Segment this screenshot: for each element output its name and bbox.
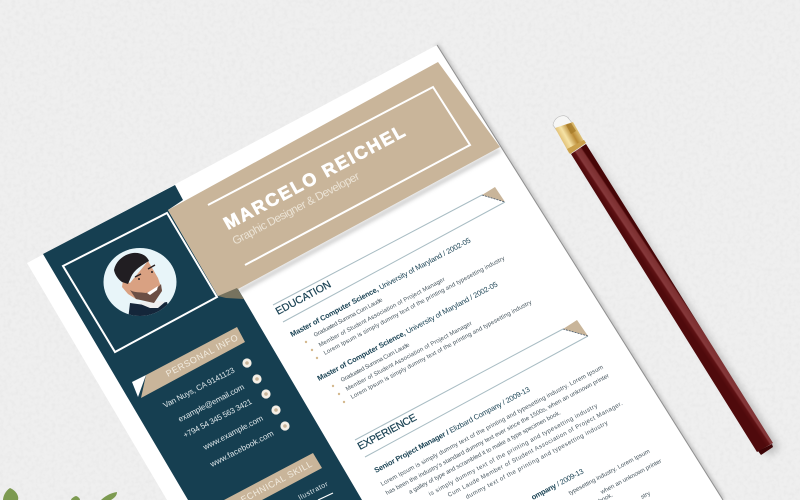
contact details list: www.example.com [201, 414, 265, 452]
education entry one: Member of Student Association of Project Manager [318, 277, 446, 349]
experience entry two [530, 448, 663, 500]
education header [273, 187, 505, 322]
job subtitle: Graphic Designer & Developer [231, 170, 362, 248]
experience entry one: Cum Laude Member of Student Association of Project Manager. [447, 400, 624, 499]
contact details list: www.facebook.com [208, 429, 276, 469]
name heading: MARCELO REICHEL [220, 121, 408, 233]
resume paper sheet [27, 45, 723, 500]
technical skill heading ribbon [224, 453, 322, 500]
banner inner frame [208, 87, 470, 265]
experience entry one: dummy text of the printing and typesetting industry [465, 419, 610, 500]
banner shadow [238, 150, 500, 292]
experience entry one: is simply dummy text of the printing and typesetting industry [428, 402, 600, 498]
experience entry two: when an unknown printer [599, 458, 663, 496]
paper shadow [437, 45, 723, 500]
education header: EDUCATION [274, 279, 333, 318]
experience entry one: Lorem Ipsum is simply dummy text of the printing and typesetting industry. Lorem Ipsum [380, 364, 605, 488]
experience header: EXPERIENCE [356, 413, 419, 453]
education entry one: Lorem Ipsum is simply dummy text of the printing and typesetting industry [323, 256, 506, 357]
contact details list: +794 54 345 563 3421 [182, 397, 254, 440]
personal info heading ribbon [132, 327, 245, 398]
education entry two: Member of Student Association of Project Manager [345, 321, 473, 393]
experience entry one: Senior Project Manager / Elizbard Company / 2009-13 [373, 385, 532, 475]
header banner: tan [168, 62, 500, 296]
pencil [553, 116, 773, 455]
education entry one: Master of Computer Science, University of Maryland / 2002-05 [289, 236, 472, 339]
photo frame [63, 213, 217, 352]
experience header [355, 320, 588, 457]
education entry two: Lorem Ipsum is simply dummy text of the printing and typesetting industry [350, 300, 533, 401]
plant leaves [3, 488, 117, 500]
pencil shadow [580, 150, 780, 456]
contact details list [162, 366, 276, 469]
education entry two: Master of Computer Science, University of Maryland / 2002-05 [316, 280, 499, 383]
experience entry two: typesetting industry. Lorem Ipsum [568, 448, 651, 497]
personal info heading ribbon: PERSONAL INFO [164, 333, 240, 379]
contact icons [242, 358, 290, 431]
paper right edge [437, 45, 723, 500]
experience entry one: has been the industry's standard dummy text ever since the 1500s, when an unknown printer [385, 372, 610, 497]
contact details list: example@email.com [177, 382, 246, 424]
education entry one: Graduated Summa Cum Laude [313, 297, 385, 339]
banner fold corner [218, 288, 244, 299]
education entry two: Graduated Summa Cum Laude [340, 342, 412, 384]
contact details list: Van Nuys, CA 9141123 [162, 366, 237, 410]
portrait photo [104, 248, 176, 320]
experience entry one: a galley of type and scrambled it to make a type specimen book. [408, 409, 562, 496]
sidebar: navy panel [43, 185, 362, 500]
